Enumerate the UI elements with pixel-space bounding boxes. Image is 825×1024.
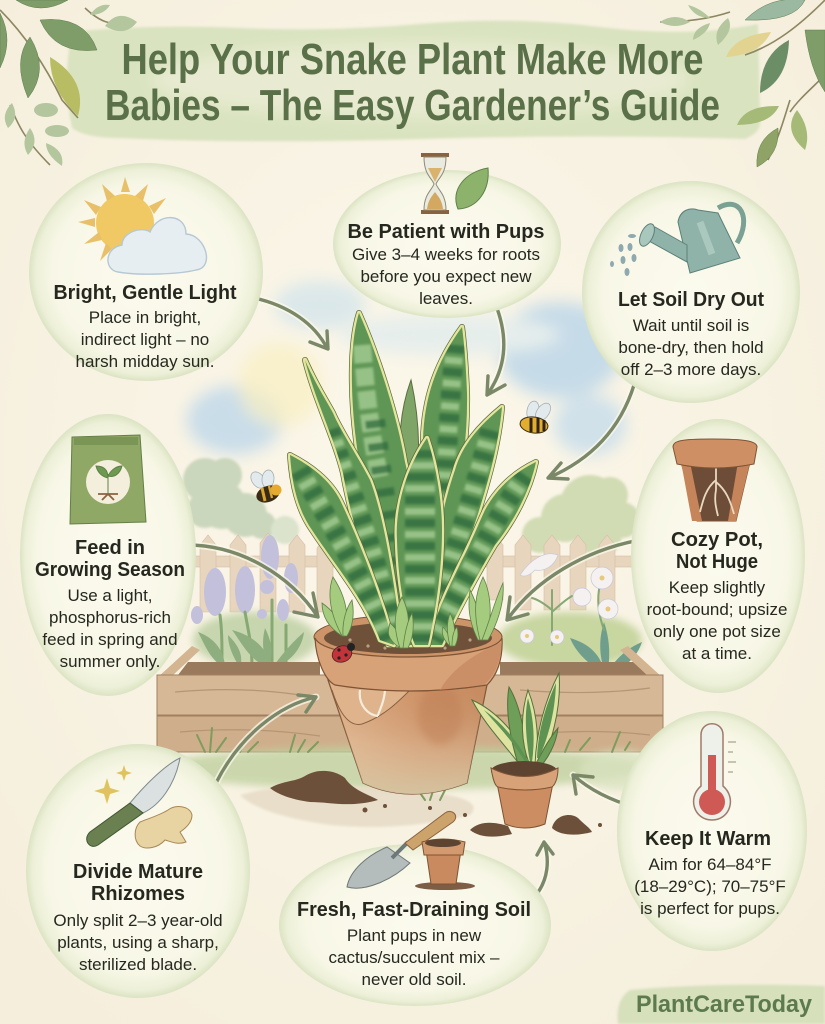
heading: Bright, Gentle Light xyxy=(54,282,237,304)
icon: sun and cloud xyxy=(78,177,206,274)
garden plants right xyxy=(498,554,642,670)
bush: left xyxy=(183,458,299,544)
baby pups xyxy=(322,577,503,648)
body text: bone-dry, then hold xyxy=(618,338,764,357)
body text: at a time. xyxy=(682,644,752,663)
arrow: patience xyxy=(487,303,505,395)
icon: knife, ginger, sparkles xyxy=(87,758,192,848)
icon: fertilizer bag xyxy=(70,435,146,524)
arrow: cozy pot xyxy=(507,540,640,620)
arrows xyxy=(187,297,640,895)
garden background xyxy=(157,458,663,837)
body text xyxy=(53,911,223,974)
body text: Keep slightly xyxy=(669,578,766,597)
leaf: center xyxy=(397,438,442,645)
corner foliage: left xyxy=(0,0,137,166)
raised bed xyxy=(157,646,663,752)
body text: is perfect for pups. xyxy=(640,899,780,918)
heading: Cozy Pot, xyxy=(671,529,763,551)
body text: feed in spring and xyxy=(42,630,178,649)
panel: be patient with pups xyxy=(333,155,561,318)
watercolor sky xyxy=(187,281,626,455)
heading: Rhizomes xyxy=(91,883,185,905)
leaf: back right xyxy=(420,324,470,500)
leaf: right low xyxy=(428,462,536,645)
panel: let soil dry out xyxy=(582,181,800,403)
body text: summer only. xyxy=(60,652,160,671)
heading xyxy=(35,537,185,581)
heading: Fresh, Fast-Draining Soil xyxy=(297,899,531,921)
body text xyxy=(647,578,787,663)
watermark: PlantCareToday xyxy=(636,991,813,1018)
body text xyxy=(352,245,540,308)
body text xyxy=(634,855,786,918)
leaf: lowest left xyxy=(290,455,394,645)
body text: before you expect new xyxy=(360,267,532,286)
heading: Be Patient with Pups xyxy=(348,221,544,243)
title band xyxy=(67,21,760,141)
body text: off 2–3 more days. xyxy=(621,360,761,379)
arrow: fresh soil xyxy=(536,842,553,895)
body text: cactus/succulent mix – xyxy=(328,948,500,967)
title line 1: Help Your Snake Plant Make More xyxy=(122,35,704,84)
body text: Only split 2–3 year-old xyxy=(53,911,223,930)
bush: right xyxy=(522,475,640,557)
bee: left xyxy=(248,469,282,506)
ground xyxy=(160,728,660,837)
body text: only one pot size xyxy=(653,622,781,641)
small plant leaves xyxy=(472,673,559,770)
heading: Growing Season xyxy=(35,559,185,581)
bee: right xyxy=(519,400,554,435)
heading: Divide Mature xyxy=(73,861,203,883)
pot rim front xyxy=(315,638,502,691)
body text: plants, using a sharp, xyxy=(57,933,219,952)
large terracotta pot body xyxy=(314,615,502,794)
arrow: soil dry xyxy=(548,385,634,479)
body text: never old soil. xyxy=(362,970,466,989)
heading xyxy=(671,529,763,573)
body text: sterilized blade. xyxy=(79,955,197,974)
panel: cozy pot, not huge xyxy=(631,419,805,693)
arrow: feed xyxy=(187,545,318,617)
body text: (18–29°C); 70–75°F xyxy=(634,877,786,896)
panel: feed in growing season xyxy=(20,414,196,696)
heading: Keep It Warm xyxy=(645,828,771,850)
leaf: back small xyxy=(400,380,419,515)
corner foliage: right xyxy=(660,0,825,167)
body text: Use a light, xyxy=(67,586,153,605)
body text: harsh midday sun. xyxy=(76,352,214,371)
heading: Not Huge xyxy=(676,551,758,573)
heading: Feed in xyxy=(75,537,145,559)
body text: Plant pups in new xyxy=(347,926,482,945)
icon: hourglass and leaf xyxy=(421,155,488,212)
body text: Wait until soil is xyxy=(633,316,749,335)
arrow: divide xyxy=(216,695,316,783)
leaf: narrow left xyxy=(305,360,402,645)
arrow: warm xyxy=(573,775,637,808)
body text: Place in bright, xyxy=(89,308,201,327)
body text xyxy=(76,308,214,371)
heading xyxy=(73,861,203,905)
body text: phosphorus-rich xyxy=(49,608,171,627)
body text: indirect light – no xyxy=(81,330,209,349)
leaf: tall left xyxy=(352,313,424,645)
arrow: light xyxy=(250,297,328,349)
body text: Give 3–4 weeks for roots xyxy=(352,245,540,264)
leaf: right mid xyxy=(439,404,505,602)
soil piles xyxy=(270,771,602,837)
fence xyxy=(195,533,635,612)
ladybug xyxy=(330,643,355,665)
title xyxy=(105,35,720,130)
body text: Aim for 64–84°F xyxy=(648,855,772,874)
body text xyxy=(42,586,178,671)
body text: leaves. xyxy=(419,289,473,308)
heading: Let Soil Dry Out xyxy=(618,289,764,311)
panel: fresh, fast-draining soil xyxy=(279,811,551,1006)
panel: keep it warm xyxy=(617,711,807,951)
garden plants left xyxy=(191,535,317,668)
small potted pup xyxy=(472,673,559,828)
watermark xyxy=(618,985,825,1024)
snake plant xyxy=(290,313,536,645)
body text xyxy=(618,316,764,379)
icon: trowel and small pot xyxy=(347,811,475,890)
icon: pot with roots xyxy=(673,439,757,521)
panel: divide mature rhizomes xyxy=(26,744,250,998)
body text xyxy=(328,926,500,989)
panel: bright gentle light xyxy=(29,163,263,381)
icon: watering can xyxy=(610,204,744,276)
body text: root-bound; upsize xyxy=(647,600,787,619)
icon: thermometer xyxy=(694,724,736,820)
